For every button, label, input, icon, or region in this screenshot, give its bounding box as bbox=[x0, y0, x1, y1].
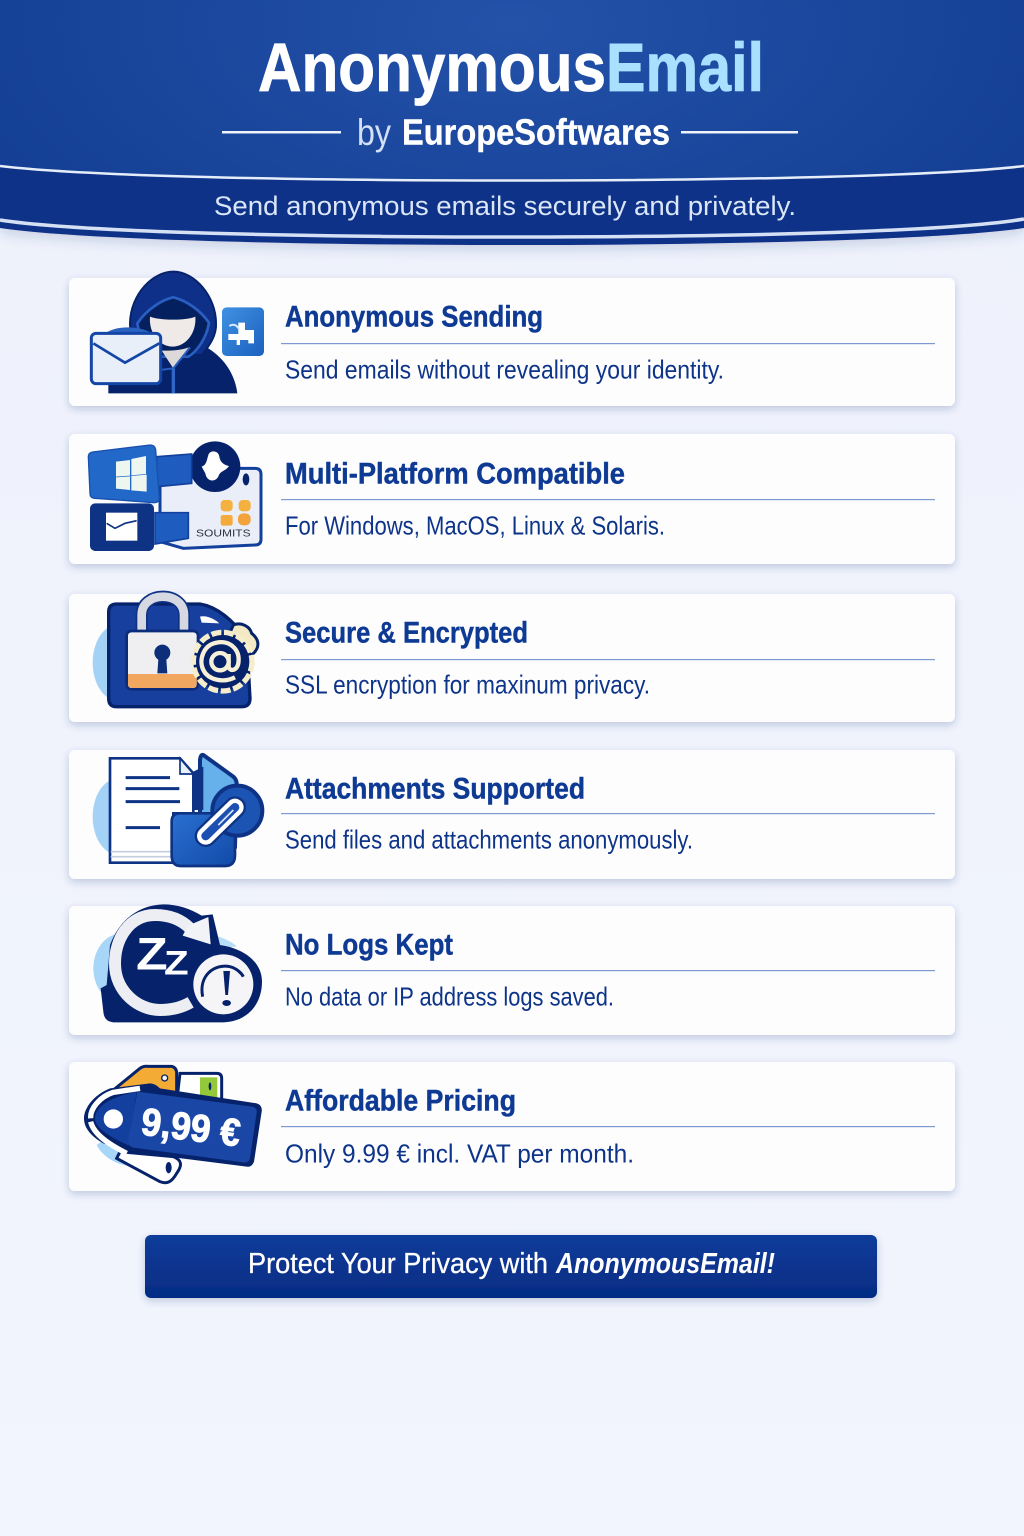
panel: Multi-Platform Compatible bbox=[69, 434, 955, 564]
byline left rule bbox=[222, 131, 341, 134]
icon: sleep cycle and alert bbox=[93, 904, 262, 1022]
icon: padlock and at-sign badge bbox=[93, 597, 258, 707]
header banner bbox=[0, 0, 1024, 245]
panel: No Logs Kept bbox=[69, 904, 955, 1035]
panel: Attachments Supported bbox=[69, 750, 955, 879]
description: For Windows, MacOS, Linux & Solaris. bbox=[285, 510, 665, 540]
description: Send files and attachments anonymously. bbox=[285, 824, 693, 854]
description: Send emails without revealing your identity. bbox=[285, 354, 724, 384]
byline right rule bbox=[681, 131, 798, 134]
icon: sleep cycle and alert: Z bbox=[164, 944, 189, 982]
icon: document and paperclip bbox=[93, 755, 262, 866]
description: No data or IP address logs saved. bbox=[285, 982, 614, 1012]
heading: Attachments Supported bbox=[285, 772, 585, 806]
ribbon band bbox=[0, 160, 1024, 245]
main title accent: Email bbox=[606, 29, 764, 106]
heading: Multi-Platform Compatible bbox=[285, 458, 625, 490]
description: Only 9.99 € incl. VAT per month. bbox=[285, 1138, 634, 1168]
icon: platform connectors bbox=[88, 441, 261, 551]
icon: hooded figure with envelope bbox=[91, 272, 264, 393]
icon: platform connectors: SOUMITS bbox=[196, 529, 251, 540]
heading: Anonymous Sending bbox=[285, 300, 543, 334]
tagline: Send anonymous emails securely and privately. bbox=[214, 191, 796, 221]
button product name: AnonymousEmail! bbox=[555, 1248, 775, 1280]
header panel bbox=[0, 0, 1024, 180]
heading: Secure & Encrypted bbox=[285, 616, 528, 650]
main title: Anonymous bbox=[258, 29, 606, 106]
byline "by": by bbox=[357, 112, 391, 153]
panel: Affordable Pricing bbox=[69, 1062, 955, 1191]
button text: Protect Your Privacy with bbox=[248, 1248, 548, 1280]
panel: Secure & Encrypted bbox=[69, 594, 955, 722]
icon: price tags: 9,99 € bbox=[139, 1101, 243, 1155]
icon: sleep cycle and alert: Z bbox=[136, 929, 168, 980]
call to action button bbox=[145, 1235, 877, 1298]
description: SSL encryption for maxinum privacy. bbox=[285, 670, 650, 700]
heading: No Logs Kept bbox=[285, 928, 453, 962]
panel: Anonymous Sending bbox=[69, 272, 955, 406]
byline company: EuropeSoftwares bbox=[402, 112, 670, 152]
heading: Affordable Pricing bbox=[285, 1084, 516, 1118]
icon: price tags bbox=[84, 1066, 262, 1183]
